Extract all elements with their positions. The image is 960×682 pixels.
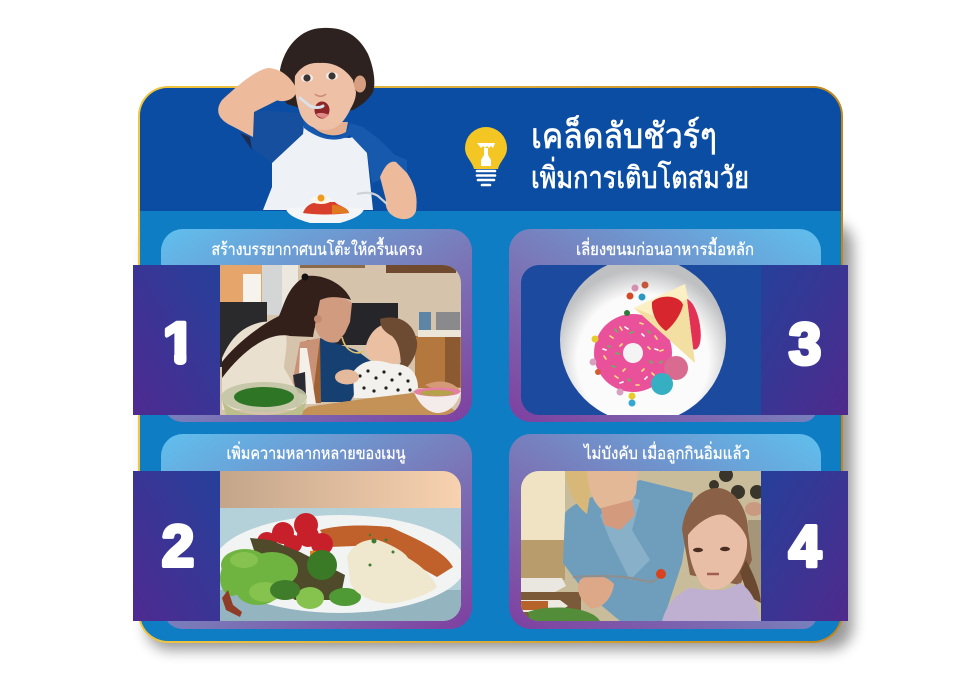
panel 3 <box>509 229 848 423</box>
fork <box>357 193 387 204</box>
number tab 2 <box>133 471 220 621</box>
woman shirt <box>563 480 693 621</box>
child fist <box>266 68 296 101</box>
child hand <box>386 196 416 219</box>
left sleeve <box>240 110 303 163</box>
eyes <box>301 74 313 82</box>
number tab 3 <box>761 265 848 415</box>
photo: dessert plate <box>521 257 761 423</box>
face <box>295 63 356 130</box>
number tab 4: 4 <box>789 514 821 579</box>
panel background <box>161 229 472 422</box>
panel 4 <box>509 434 848 629</box>
woman face <box>315 297 352 343</box>
number tab 2: 2 <box>162 514 194 579</box>
card shadow <box>146 222 853 650</box>
woman hand, fork <box>578 575 614 608</box>
panel 1 <box>133 229 472 422</box>
mouth <box>314 102 330 118</box>
panel 2 <box>133 434 472 629</box>
salad bowl <box>221 382 307 412</box>
title: เพิ่มการเติบโตสมวัย <box>531 157 749 195</box>
table <box>297 393 461 415</box>
woman hair <box>222 276 351 378</box>
heading: ไม่บังคับ เมื่อลูกกินอิ่มแล้ว <box>582 441 750 464</box>
ear <box>354 76 366 92</box>
plate of food <box>286 194 364 223</box>
panel background <box>509 229 821 422</box>
girl <box>682 488 752 585</box>
shirt body <box>263 124 373 210</box>
woman hair <box>565 471 590 514</box>
photo: plate with salmon and salad <box>214 471 466 621</box>
right sleeve and collar <box>302 113 407 183</box>
title: เคล็ดลับชัวร์ๆ <box>531 115 717 156</box>
neck <box>312 122 348 135</box>
number tab 4 <box>761 471 848 621</box>
number tab 1: 1 <box>163 311 195 376</box>
hair <box>280 28 374 112</box>
illustration: child eating <box>218 28 417 223</box>
woman body <box>292 338 320 390</box>
photo: mother and daughter sharing spaghetti <box>220 265 461 415</box>
heading: เพิ่มความหลากหลายของเมนู <box>226 441 406 464</box>
woman face <box>587 471 638 510</box>
number tab 3: 3 <box>789 312 821 377</box>
header band <box>140 88 841 211</box>
nose <box>315 94 326 96</box>
number tab 1 <box>133 265 220 415</box>
soup bowl <box>414 392 461 413</box>
spaghetti <box>342 337 364 353</box>
girl <box>365 326 400 364</box>
panel background <box>509 434 821 629</box>
title <box>531 115 749 195</box>
child head <box>280 28 374 130</box>
heading: เลี่ยงขนมก่อนอาหารมื้อหลัก <box>576 237 754 259</box>
other arm <box>380 162 417 216</box>
main card <box>138 86 843 643</box>
spoon <box>300 98 323 108</box>
icon: light bulb <box>465 127 507 185</box>
photo: mother offering food to upset girl <box>521 468 764 621</box>
raised arm <box>218 68 278 137</box>
heading: สร้างบรรยากาศบนโต๊ะให้ครื้นเครง <box>212 237 422 259</box>
panel background <box>161 434 472 629</box>
